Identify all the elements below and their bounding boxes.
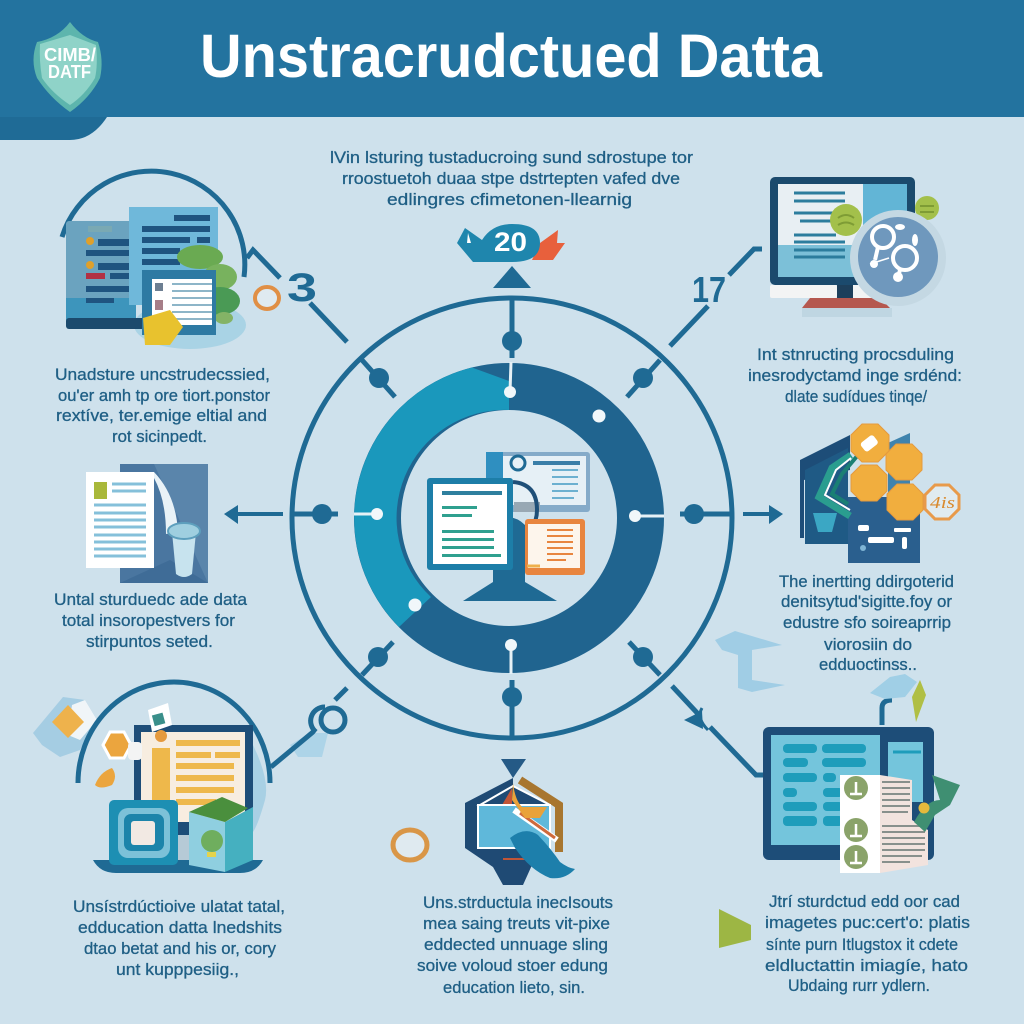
title: Unstracrudctued Datta (200, 22, 823, 90)
icon: book with orange hexagons: 4is (930, 493, 955, 512)
text block: middle-right (779, 572, 954, 674)
text block: bottom-center: eddected unnuage sling (424, 935, 608, 954)
text block: top-left (55, 365, 270, 446)
text block: bottom-center: soive voloud stoer edung (417, 956, 608, 975)
logo shield badge: DATF (48, 62, 91, 82)
text block: bottom-center (417, 893, 613, 997)
text block: middle-right: viorosiin do (824, 635, 912, 654)
text block: middle-right: edustre sfo soireaprrip (783, 613, 951, 632)
text block: bottom-center: mea saing treuts vit-pixe (423, 914, 610, 933)
text block: top-left: Unadsture uncstrudecssied, (55, 365, 270, 384)
icon: green triangle (719, 909, 751, 948)
year badge 20 (457, 224, 565, 288)
icon: monitor with magnifier (770, 177, 946, 317)
intro text: rroostuetoh duaa stpe dstrtepten vafed dve (342, 169, 680, 188)
text block: middle-left: Untal sturduedc ade data (54, 590, 248, 609)
icon: orange ring top-left (255, 287, 279, 309)
intro text: lVin lsturing tustaducroing sund sdrostupe tor (330, 148, 693, 167)
text block: middle-right: denitsytud'sigitte.foy or (781, 592, 952, 611)
arrow: right (743, 505, 783, 524)
icon: book with orange hexagons (800, 424, 959, 563)
text block: bottom-right: Ubdaing rurr ydlern. (788, 976, 930, 995)
text block: top-right (748, 345, 962, 406)
logo shield badge (34, 22, 102, 112)
intro text (330, 148, 693, 209)
text block: middle-left: stirpuntos seted. (86, 632, 213, 651)
connector: bottom-right (672, 686, 763, 775)
connector: top-right: 17 (692, 269, 726, 310)
icon: documents top-left (62, 171, 246, 349)
text block: bottom-center: Uns.strductula inecIsouts (423, 893, 613, 912)
intro text: edlingres cfimetonen-llearnig (387, 190, 632, 209)
text block: middle-left: total insoropestvers for (62, 611, 235, 630)
text block: bottom-left: Unsístrdúctioive ulatat tatal, (73, 897, 285, 916)
connector: top-right (670, 249, 762, 346)
central ring diagram (292, 298, 732, 738)
connector: bottom-left (271, 688, 347, 767)
text block: bottom-right: Jtrí sturdctud edd oor cad (769, 892, 960, 911)
icon: bottom hexagon book (465, 759, 575, 885)
arrow: left (224, 505, 283, 524)
central computer and documents icon (427, 452, 590, 601)
text block: bottom-left (73, 897, 285, 979)
ring nodes (292, 298, 731, 738)
text block: bottom-left: unt kupppesiig., (116, 960, 239, 979)
text block: top-left: ou'er amh tp ore tiort.ponstor (58, 386, 270, 405)
icon: document and cup (86, 464, 208, 583)
header band (0, 0, 1024, 140)
text block: top-right: Int stnructing procsduling (757, 345, 954, 364)
text block: top-right: inesrodyctamd inge srdénd: (748, 366, 962, 385)
text block: middle-right: edduoctinss.. (819, 655, 917, 674)
text block: bottom-right: sínte purn Itlugstox it cdete (766, 935, 958, 954)
logo shield badge: CIMB/ (44, 45, 96, 65)
text block: bottom-right: imagetes puc:cert'o: platis (765, 913, 970, 932)
text block: middle-right: The inertting ddirgoterid (779, 572, 954, 591)
text block: bottom-center: education lieto, sin. (443, 978, 585, 997)
text block: bottom-right: eldluctattin imiagíe, hato (765, 956, 968, 975)
icon: laptop, boxes and documents (33, 682, 270, 873)
text block: top-left: rot sicinpedt. (112, 427, 207, 446)
text block: top-left: rextíve, ter.emige eltial and (56, 406, 267, 425)
text block: bottom-right (765, 892, 970, 995)
text block: bottom-left: edducation datta lnedshits (78, 918, 282, 937)
year badge 20: 20 (494, 227, 527, 257)
icon: orange ring bottom (393, 830, 427, 860)
connector: top-left (247, 250, 347, 342)
connector: top-left: 3 (287, 266, 317, 310)
text block: bottom-left: dtao betat and his or, cory (84, 939, 276, 958)
icon: faint blue T shape (715, 631, 785, 692)
icon: tablet with document (763, 674, 960, 873)
text block: middle-left (54, 590, 248, 651)
donut ring (354, 362, 664, 674)
text block: top-right: dlate sudídues tinqe/ (785, 387, 927, 406)
